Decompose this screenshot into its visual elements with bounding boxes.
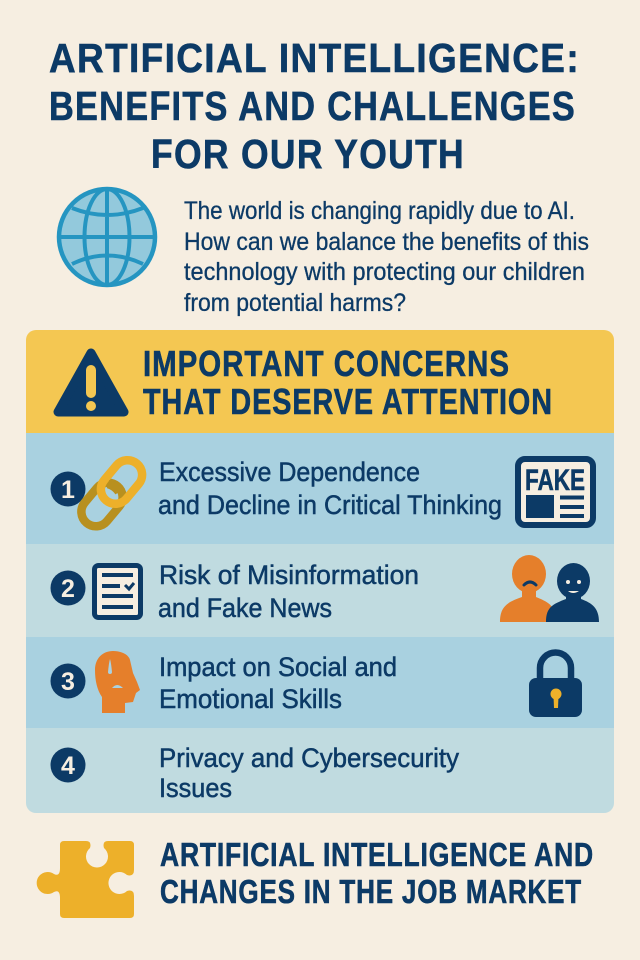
icon: padlock <box>529 652 582 717</box>
row 3 text: Impact on Social and <box>159 652 397 682</box>
icon: fake news <box>518 459 593 525</box>
sad person <box>500 555 554 622</box>
row 4 background <box>26 728 614 813</box>
row 2 text: Risk of Misinformation <box>159 560 419 590</box>
intro text: from potential harms? <box>184 289 406 317</box>
panel heading <box>143 343 553 422</box>
intro text: The world is changing rapidly due to AI. <box>184 197 575 225</box>
number badge 2: 2 <box>61 575 75 603</box>
icon: sad and happy people <box>500 555 599 622</box>
row 2 text <box>158 560 419 623</box>
row 1 text: and Decline in Critical Thinking <box>158 490 502 520</box>
row 3 background <box>26 637 614 728</box>
panel header background <box>26 330 614 433</box>
title: FOR OUR YOUTH <box>151 131 465 177</box>
number badge 1 <box>50 472 86 506</box>
row 4 text: Privacy and Cybersecurity <box>159 743 459 773</box>
row 1 text: Excessive Dependence <box>159 457 420 487</box>
footer heading <box>160 836 594 910</box>
row 3 text: Emotional Skills <box>159 684 342 714</box>
row 4 text <box>159 743 459 803</box>
panel: important concerns <box>26 330 614 813</box>
row 1 background <box>26 433 614 544</box>
row 3 text <box>159 652 397 714</box>
panel heading: IMPORTANT CONCERNS <box>143 343 510 384</box>
icon: globe <box>59 189 155 285</box>
title <box>49 35 580 177</box>
icon: chain link <box>75 454 148 532</box>
icon: head with sad face <box>95 651 140 713</box>
icon: puzzle piece <box>37 841 134 918</box>
number badge 3 <box>50 664 86 698</box>
icon: fake news: FAKE <box>525 464 585 497</box>
icon: checklist document <box>94 566 140 618</box>
title: ARTIFICIAL INTELLIGENCE: <box>49 35 580 81</box>
number badge 3: 3 <box>61 668 75 696</box>
number badge 2 <box>50 570 86 606</box>
icon: warning triangle <box>58 353 124 412</box>
row 1 text <box>158 457 502 520</box>
intro text: How can we balance the benefits of this <box>184 228 589 256</box>
intro text <box>184 197 589 317</box>
intro text: technology with protecting our children <box>184 258 585 286</box>
row 2 background <box>26 544 614 637</box>
number badge 4: 4 <box>61 752 75 780</box>
number badge 1: 1 <box>61 476 75 504</box>
happy person <box>546 563 599 622</box>
row 4 text: Issues <box>159 773 232 803</box>
row 2 text: and Fake News <box>158 593 332 623</box>
number badge 4 <box>50 748 86 782</box>
